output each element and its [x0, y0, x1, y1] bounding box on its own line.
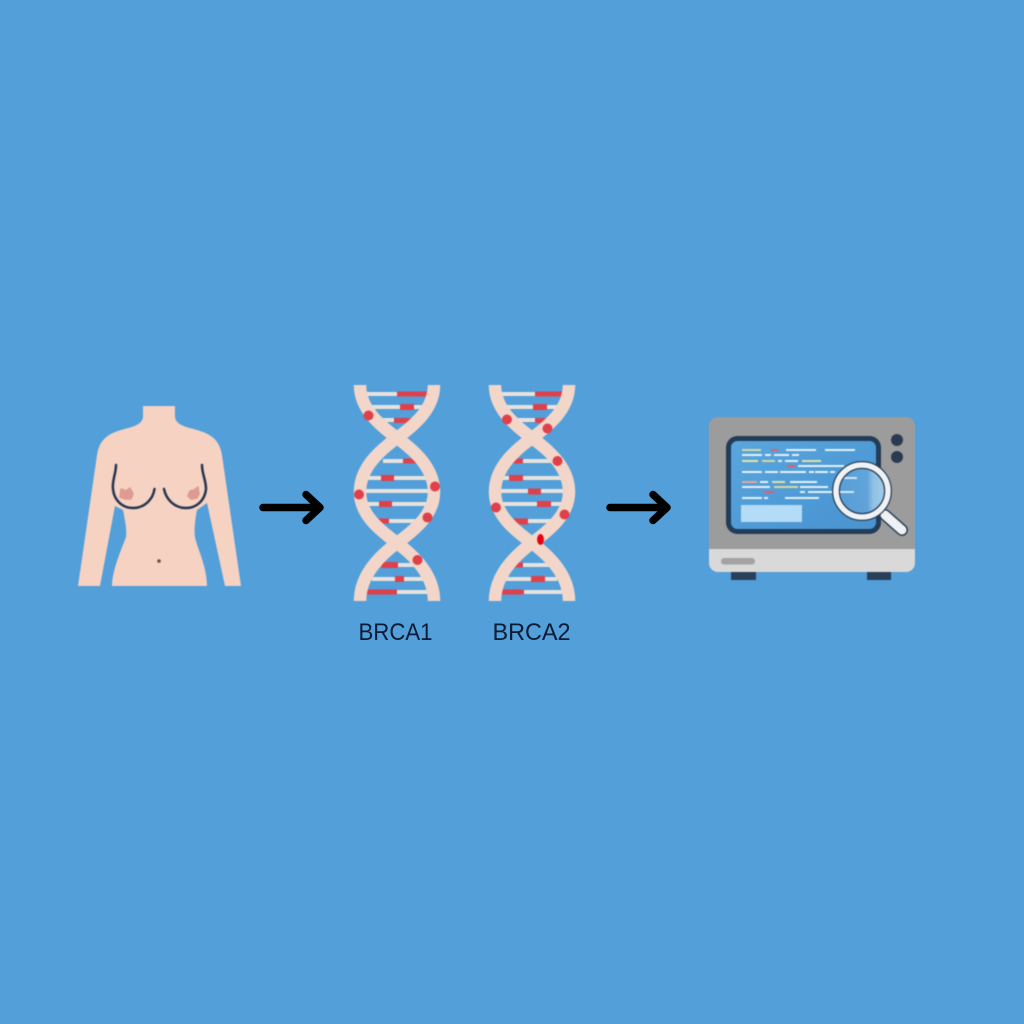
DNA helix: BRCA1: [354, 385, 440, 601]
control knobs: [891, 434, 903, 463]
mutation dots: [491, 414, 570, 520]
red mutation segments: [501, 392, 562, 594]
red mutation mark: [537, 534, 544, 545]
areola left: [120, 488, 133, 499]
machine feet: [731, 571, 891, 580]
highlighted readout box: [741, 505, 802, 522]
areola right: [188, 487, 199, 499]
navel: [157, 559, 161, 563]
label: BRCA1: BRCA1: [358, 619, 432, 646]
mutation dots: [354, 410, 440, 565]
helix strands: [360, 385, 434, 601]
breast contour right: [164, 465, 206, 508]
magnifying glass: [836, 465, 902, 530]
screen: [728, 438, 878, 532]
breast contour left: [113, 465, 154, 508]
helix strands: [495, 385, 569, 601]
machine body: [709, 417, 915, 572]
arrow: DNA to analyzer: [610, 494, 667, 520]
icon: sequencing machine: [709, 417, 915, 580]
base slot: [721, 558, 755, 564]
base-pair rungs: [365, 392, 430, 594]
label: BRCA2: BRCA2: [492, 619, 570, 646]
base-pair rungs: [501, 392, 563, 594]
sequence data lines: [742, 449, 857, 499]
DNA helix: BRCA2: [491, 385, 570, 601]
red mutation segments: [367, 392, 427, 594]
icon: female torso: [78, 406, 241, 586]
machine base: [709, 549, 915, 572]
arrow: torso to DNA: [263, 494, 320, 520]
